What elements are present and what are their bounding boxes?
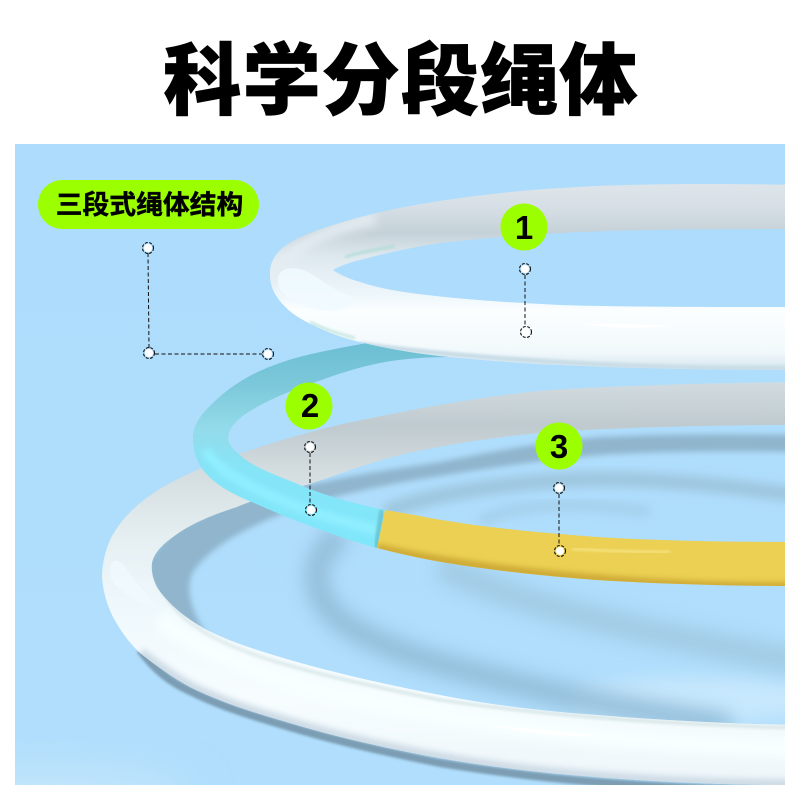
rope segment 3: yellow section — [377, 510, 800, 587]
callout: legend corner — [142, 242, 274, 360]
label pill — [38, 180, 259, 229]
gloss highlight — [278, 268, 334, 310]
gloss streak — [490, 726, 597, 736]
panel background — [15, 144, 785, 785]
callout 3: 3 — [550, 428, 568, 465]
callout 3 — [536, 422, 582, 556]
gloss highlight — [110, 561, 160, 610]
rope segment 1: top white ring — [270, 184, 800, 370]
callout 2 — [286, 382, 332, 516]
title: 科学分段绳体 — [163, 37, 639, 125]
rope segment 3: large white ring — [102, 382, 800, 785]
callout 2: 2 — [301, 387, 319, 424]
callout 1 — [500, 204, 548, 338]
callout 1: 1 — [515, 209, 533, 246]
label pill: 三段式绳体结构 — [56, 190, 243, 220]
ground shadows — [0, 434, 800, 800]
rope segment 2: teal section — [193, 335, 457, 548]
gloss streak — [583, 324, 670, 328]
